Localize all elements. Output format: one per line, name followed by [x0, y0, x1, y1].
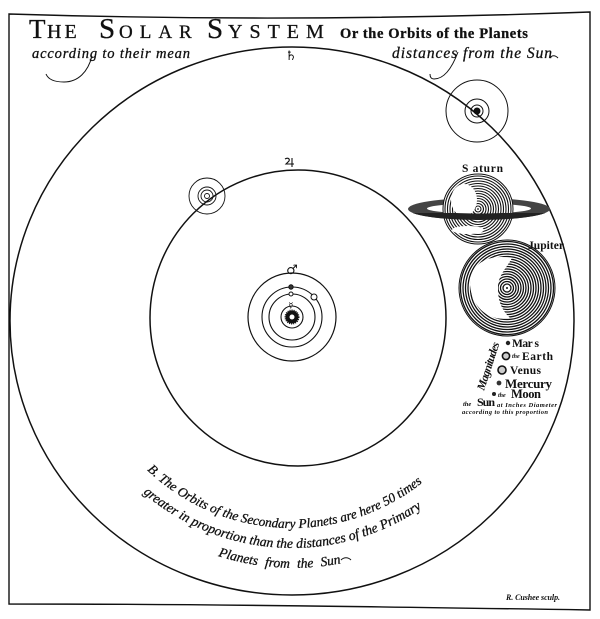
subtitle left: according to their mean	[32, 46, 190, 62]
subtitle right	[392, 45, 558, 79]
Saturn globe	[443, 174, 513, 244]
Saturn orbit system	[446, 80, 508, 142]
title: YSTEM	[228, 21, 331, 43]
subtitle right: distances from the Sun	[392, 45, 552, 62]
inner planet markers: ☿	[289, 301, 293, 310]
planet: Jupiter	[459, 240, 555, 336]
title: S	[99, 13, 115, 45]
title: OLAR	[119, 22, 199, 43]
Moon magnitude	[492, 387, 541, 401]
Saturn ring	[408, 198, 550, 220]
title: HE	[47, 21, 80, 43]
title: S	[207, 13, 223, 45]
label: Jupiter: Jupiter	[528, 240, 564, 252]
title: Or the Orbits of the Planets	[340, 26, 528, 42]
subtitle left	[32, 46, 190, 82]
Mars magnitude: Mar s	[512, 338, 540, 350]
Jupiter symbol	[285, 158, 294, 167]
title	[29, 13, 528, 45]
Moon magnitude: Moon	[511, 387, 541, 401]
Earth magnitude: the	[512, 354, 520, 360]
Sun note: at Inches Diameter	[497, 402, 557, 409]
engraver signature: R. Cushee sculp.	[505, 593, 560, 602]
Saturn ring front	[413, 213, 545, 220]
Saturn symbol: ♄	[285, 49, 297, 64]
label: Magnitudes: Magnitudes	[475, 340, 502, 393]
orbits of Earth, Venus and Mercury	[262, 287, 322, 347]
Sun note: Sun	[477, 395, 495, 409]
Venus magnitude: Venus	[510, 365, 542, 377]
Jupiter orbit system	[189, 178, 225, 214]
Mars symbol: ♂	[286, 263, 298, 278]
note on the orbits: B. The Orbits of the Secondary Planets are here 50 times	[146, 464, 422, 531]
Earth magnitude	[502, 351, 554, 363]
Sun note	[462, 395, 557, 416]
label: Saturn: S aturn	[462, 163, 504, 175]
note on the orbits	[141, 464, 422, 570]
magnitudes legend	[462, 338, 557, 416]
title: T	[29, 14, 46, 44]
inner planet markers	[289, 285, 317, 310]
orbit of Jupiter	[150, 170, 446, 466]
Sun note: according to this proportion	[462, 409, 548, 416]
planet: Saturn	[408, 174, 550, 244]
Mercury magnitude: Mercury	[505, 376, 552, 391]
Sun note: the	[463, 401, 471, 408]
note on the orbits: greater in proportion than the distances of the Primary	[141, 490, 420, 548]
Moon magnitude: the	[498, 393, 506, 399]
Earth magnitude: Earth	[522, 351, 554, 363]
note on the orbits: Planets from the Sun	[218, 548, 341, 570]
orbit of Mars	[248, 273, 336, 361]
icon: sun	[286, 310, 298, 324]
